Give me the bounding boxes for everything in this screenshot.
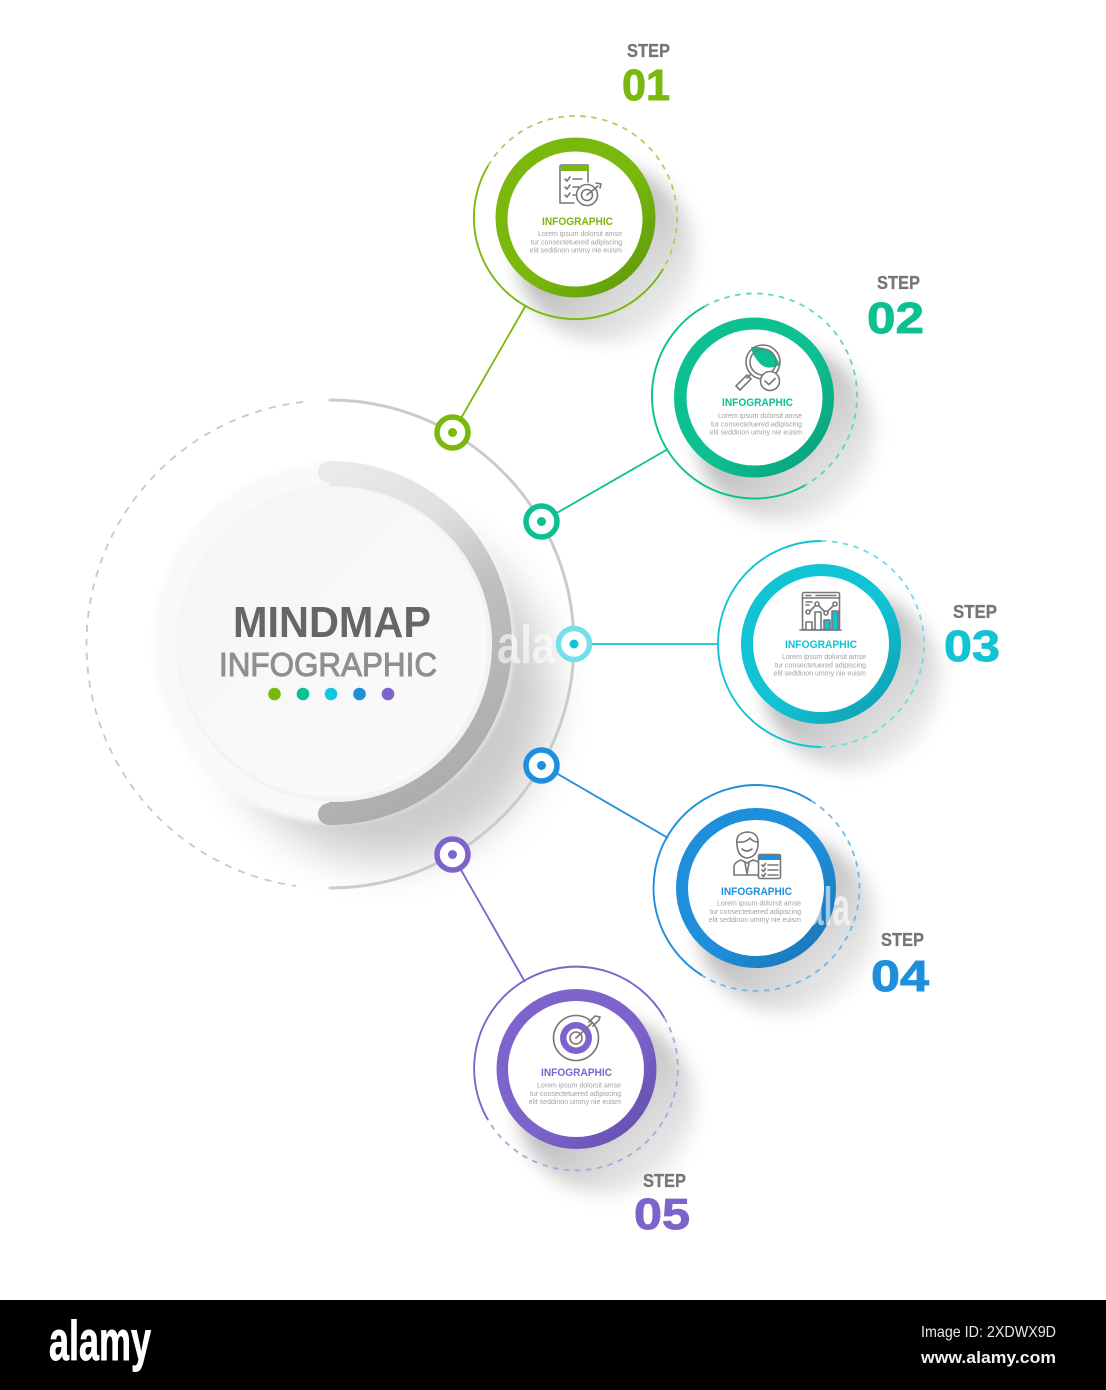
icon: person with list — [734, 832, 780, 878]
step 4 number: 04 — [871, 952, 930, 1001]
step 5 dashed arc — [488, 1018, 678, 1170]
hub grey crescent — [318, 461, 512, 825]
step 3 heading: INFOGRAPHIC — [785, 639, 857, 651]
step 3 body text — [774, 654, 866, 678]
step 4 shadow — [699, 837, 875, 1013]
footer image id: Image ID: 2XDWX9D — [921, 1324, 1056, 1341]
step 5 heading: INFOGRAPHIC — [541, 1067, 612, 1079]
step 3 body text: elit seddinon ummy nie euism — [774, 670, 866, 678]
central mindmap hub — [86, 400, 574, 888]
step 1 dashed arc — [488, 116, 677, 269]
step 4 body text: Lorem ipsum dolorsit amse — [717, 900, 801, 908]
step 2 body text: tur consectetuered adipiscing — [711, 422, 802, 428]
step 1 body text: elit seddinon ummy nie euism — [530, 248, 622, 254]
watermark overlays: ala — [497, 615, 556, 675]
icon: checklist and target — [560, 165, 601, 206]
footer url: www.alamy.com — [920, 1348, 1056, 1367]
step 5 body text: tur consectetuered adipiscing — [530, 1091, 621, 1098]
step 1 solid arc — [474, 166, 663, 319]
hub faint halo — [153, 463, 513, 823]
step 4 dashed arc — [702, 801, 859, 991]
step 2 body text — [710, 413, 802, 436]
watermark overlays — [497, 615, 851, 937]
step 3 solid arc — [718, 541, 821, 747]
step 4 heading: INFOGRAPHIC — [721, 886, 792, 898]
node 5 — [437, 839, 468, 870]
panel: step 5 — [474, 967, 695, 1239]
node 4 — [526, 750, 557, 781]
step 1 shadow — [518, 166, 694, 342]
step 5 body text: elit seddinon ummy nie euism — [529, 1099, 621, 1106]
step 2 dashed arc — [704, 293, 857, 485]
step 2 number: 02 — [867, 294, 924, 343]
step 2 body text: Lorem ipsum dolorsit amse — [718, 413, 802, 420]
step 3 dashed arc — [821, 541, 924, 747]
step 4 solid arc — [654, 785, 811, 975]
hub disc — [176, 486, 492, 802]
step 1 body text: Lorem ipsum dolorsit amse — [538, 231, 622, 238]
icon: target with arrow — [554, 1016, 600, 1060]
step 3 ring — [741, 564, 901, 724]
step 2 ring — [674, 318, 834, 478]
step 4 body text: tur consectetuered adipiscing — [710, 909, 801, 916]
step 5 shadow — [519, 1018, 695, 1194]
step 2 label: STEP — [877, 273, 920, 293]
panel: step 3 — [718, 541, 1000, 769]
node 2 — [526, 506, 557, 537]
connector lines — [460, 305, 719, 982]
hub title: MINDMAP — [233, 598, 431, 647]
step 5 body text — [529, 1082, 621, 1106]
step 3 body text: Lorem ipsum dolorsit amse — [782, 654, 866, 661]
icon: magnifier with check — [736, 345, 780, 390]
panel: step 4 — [654, 785, 930, 1013]
step 5 body text: Lorem ipsum dolorsit amse — [537, 1082, 621, 1090]
step 1 body text — [530, 231, 622, 254]
panel: step 2 — [652, 273, 924, 522]
panel: step 1 — [474, 41, 694, 342]
step 2 heading: INFOGRAPHIC — [722, 397, 793, 409]
step 3 label: STEP — [953, 602, 997, 622]
step 5 label: STEP — [643, 1171, 686, 1191]
step 5 number: 05 — [634, 1190, 690, 1239]
step 1 number: 01 — [622, 61, 670, 110]
node 1 — [437, 417, 468, 448]
step 1 ring — [496, 138, 656, 298]
step 1 heading: INFOGRAPHIC — [542, 216, 613, 228]
step 1 label: STEP — [627, 41, 670, 61]
step 1 body text: tur consectetuered adipiscing — [531, 240, 622, 246]
footer bar — [0, 1300, 1106, 1390]
hub colour dots — [268, 688, 394, 700]
hub subtitle: INFOGRAPHIC — [219, 646, 437, 683]
step 4 body text: elit seddinon ummy nie euism — [709, 917, 801, 924]
step 4 ring — [676, 808, 836, 968]
icon: browser chart — [800, 592, 841, 630]
hub outer dashed arc — [86, 402, 303, 886]
step 3 body text: tur consectetuered adipiscing — [775, 662, 866, 670]
step 3 number: 03 — [944, 622, 1000, 671]
step 5 solid arc — [474, 967, 664, 1120]
step 4 label: STEP — [881, 930, 924, 950]
hub outer solid arc — [330, 400, 574, 888]
hub shadow — [219, 529, 551, 861]
footer logo: alamy — [49, 1309, 151, 1372]
node 3 — [558, 628, 590, 660]
step 4 body text — [709, 900, 801, 924]
step 3 shadow — [764, 593, 940, 769]
watermark overlays: ala — [806, 877, 851, 937]
step 2 body text: elit seddinon ummy nie euism — [710, 430, 802, 436]
step 5 ring — [496, 989, 656, 1149]
step 2 shadow — [697, 346, 873, 522]
step 2 solid arc — [652, 307, 805, 499]
